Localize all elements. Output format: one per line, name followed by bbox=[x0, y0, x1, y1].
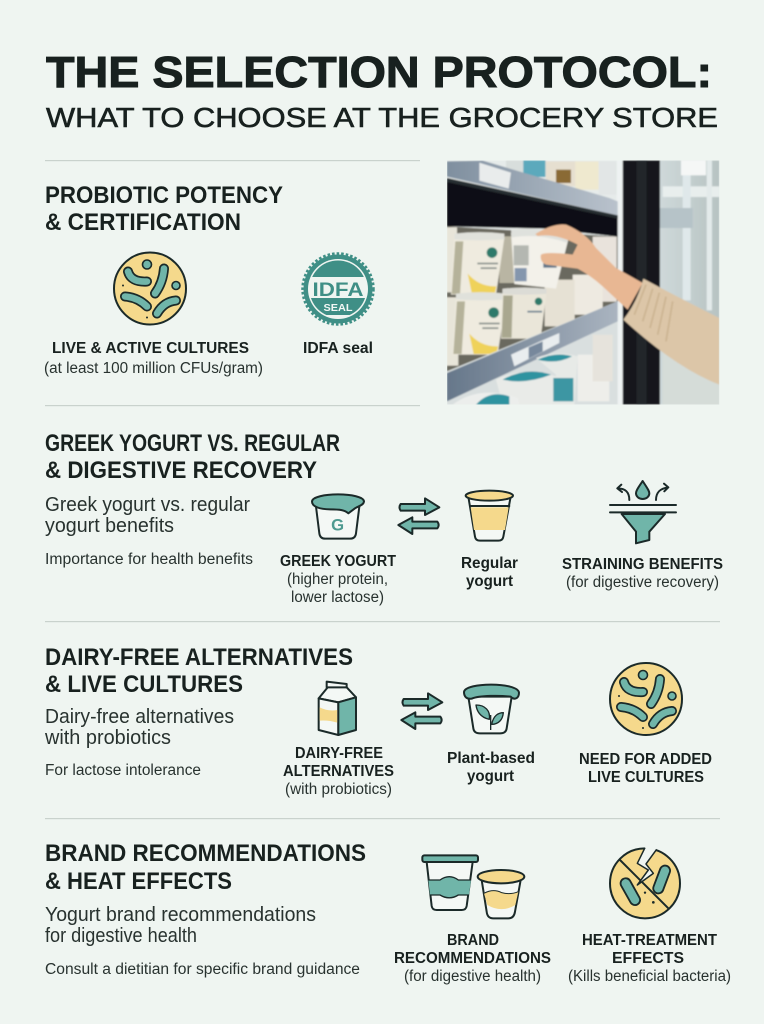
text: dairy-free with probiotics: with probiotics bbox=[44, 727, 171, 749]
panel: dairy-free alternatives bbox=[44, 644, 712, 798]
panel: greek yogurt vs regular bbox=[45, 430, 723, 606]
label: straining benefits: (for digestive recovery) bbox=[566, 574, 719, 591]
text: dairy-free with probiotics bbox=[44, 706, 234, 749]
label: heat-treatment effects: (Kills beneficial bacteria) bbox=[568, 968, 731, 985]
held cup bbox=[511, 231, 569, 289]
icon: heat-treatment broken microbe bbox=[610, 847, 680, 918]
label: live and active cultures: LIVE & ACTIVE CULTURES bbox=[52, 340, 249, 357]
label: dairy-free alternatives: (with probiotics) bbox=[285, 781, 392, 798]
icon: live cultures microbes bbox=[114, 252, 186, 324]
title bbox=[46, 48, 718, 133]
label: need for added live cultures bbox=[579, 751, 712, 786]
label: dairy-free alternatives bbox=[283, 745, 394, 798]
title: THE SELECTION PROTOCOL: bbox=[46, 48, 712, 97]
label: live and active cultures: (at least 100 million CFUs/gram) bbox=[44, 360, 263, 377]
label: regular yogurt: Regular bbox=[461, 555, 518, 572]
heading: probiotic potency: PROBIOTIC POTENCY bbox=[45, 182, 283, 209]
label: brand recommendations: BRAND bbox=[447, 932, 499, 949]
label: dairy-free alternatives: DAIRY-FREE bbox=[295, 745, 383, 762]
heading: greek yogurt section: GREEK YOGURT VS. REGULAR bbox=[45, 430, 340, 457]
label: heat-treatment effects: EFFECTS bbox=[612, 950, 684, 967]
heading: greek yogurt section: & DIGESTIVE RECOVERY bbox=[45, 457, 317, 484]
text: greek yogurt benefits bbox=[45, 494, 250, 537]
label: plant-based yogurt: yogurt bbox=[467, 768, 515, 785]
label: regular yogurt bbox=[461, 555, 518, 590]
label: heat-treatment effects: HEAT-TREATMENT bbox=[582, 932, 717, 949]
icon: exchange arrows dairy-free and plant-based bbox=[401, 693, 442, 729]
label: IDFA seal: IDFA seal bbox=[303, 340, 373, 357]
label: brand recommendations: (for digestive health) bbox=[404, 968, 541, 985]
label: need for added live cultures: NEED FOR ADDED bbox=[579, 751, 712, 768]
icon: IDFA seal: SEAL bbox=[324, 302, 353, 314]
label: live and active cultures bbox=[44, 340, 263, 377]
icon: added live cultures microbes bbox=[610, 663, 682, 735]
heading: dairy-free section bbox=[45, 644, 353, 698]
icon: greek yogurt cup: G bbox=[331, 516, 344, 535]
heading: dairy-free section: & LIVE CULTURES bbox=[45, 671, 243, 698]
lower products bbox=[496, 372, 556, 405]
heading: brand section: & HEAT EFFECTS bbox=[45, 868, 232, 895]
text: dairy-free with probiotics: Dairy-free alternatives bbox=[45, 706, 234, 728]
heading: brand section: BRAND RECOMMENDATIONS bbox=[45, 840, 366, 867]
photo: hand picking yogurt from grocery shelf bbox=[447, 160, 719, 405]
label: plant-based yogurt: Plant-based bbox=[447, 750, 535, 767]
lower shelf bbox=[448, 322, 618, 404]
icon: exchange arrows greek and regular bbox=[398, 498, 439, 534]
title: WHAT TO CHOOSE AT THE GROCERY STORE bbox=[46, 102, 718, 133]
label: brand recommendations: RECOMMENDATIONS bbox=[394, 950, 551, 967]
label: straining benefits bbox=[562, 556, 723, 591]
text: yogurt brand recommendations: Yogurt brand recommendations bbox=[45, 904, 316, 926]
icon: IDFA seal bbox=[302, 254, 374, 324]
heading: greek yogurt section bbox=[45, 430, 340, 484]
heading: probiotic potency bbox=[45, 182, 283, 236]
icon: regular yogurt cup bbox=[466, 491, 513, 541]
label: brand recommendations bbox=[394, 932, 551, 985]
label: heat-treatment effects bbox=[568, 932, 731, 985]
text: dietitian note: Consult a dietitian for specific brand guidance bbox=[45, 961, 360, 978]
icon: milk carton bbox=[319, 682, 356, 735]
label: straining benefits: STRAINING BENEFITS bbox=[562, 556, 723, 573]
hand bbox=[535, 224, 643, 310]
heading: dairy-free section: DAIRY-FREE ALTERNATIVES bbox=[45, 644, 353, 671]
label: greek yogurt: lower lactose) bbox=[291, 589, 384, 606]
label: regular yogurt: yogurt bbox=[466, 573, 514, 590]
label: plant-based yogurt bbox=[447, 750, 535, 785]
icon: greek yogurt cup bbox=[312, 494, 364, 539]
upper shelf bbox=[447, 178, 618, 237]
heading: probiotic potency: & CERTIFICATION bbox=[45, 209, 241, 236]
label: greek yogurt: GREEK YOGURT bbox=[280, 553, 396, 570]
icon: plant-based yogurt cup bbox=[464, 685, 519, 733]
icon: straining funnel bbox=[610, 481, 676, 543]
text: yogurt brand recommendations bbox=[45, 904, 316, 947]
panel: probiotic potency and certification bbox=[44, 182, 374, 377]
label: need for added live cultures: LIVE CULTURES bbox=[588, 769, 704, 786]
upper products bbox=[506, 160, 524, 172]
icon: yogurt tubs bbox=[422, 855, 524, 918]
text: importance note: Importance for health benefits bbox=[45, 551, 253, 568]
text: lactose intolerance note: For lactose intolerance bbox=[45, 762, 201, 779]
sleeve bbox=[623, 279, 719, 385]
icon: IDFA seal: IDFA bbox=[312, 280, 364, 301]
label: greek yogurt: (higher protein, bbox=[287, 571, 388, 588]
text: greek yogurt benefits: Greek yogurt vs. regular bbox=[45, 494, 250, 516]
label: greek yogurt bbox=[280, 553, 396, 606]
text: yogurt brand recommendations: for digestive health bbox=[45, 925, 197, 947]
shelf contents backdrop bbox=[447, 226, 618, 371]
label: dairy-free alternatives: ALTERNATIVES bbox=[283, 763, 394, 780]
panel: brand recommendations and heat effects bbox=[45, 840, 731, 985]
text: greek yogurt benefits: yogurt benefits bbox=[45, 515, 174, 537]
heading: brand section bbox=[45, 840, 366, 895]
